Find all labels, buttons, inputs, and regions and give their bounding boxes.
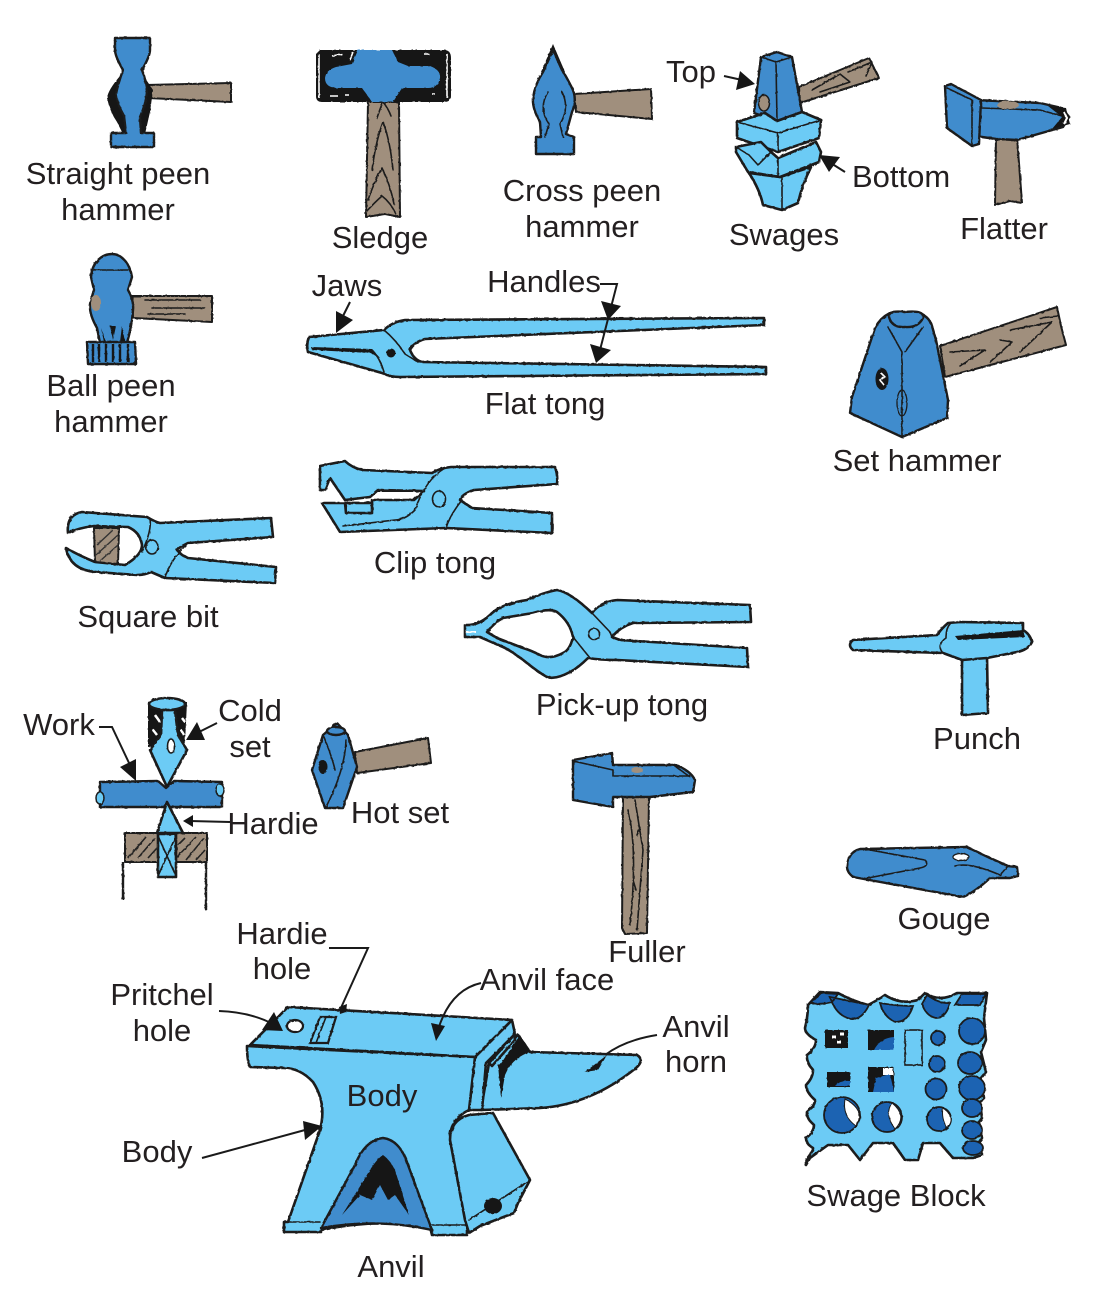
tool: anvil [110,916,730,1284]
labels: flat tong: Handles [487,264,601,299]
label: flatter: Flatter [960,211,1048,246]
label: ball peen hammer: Ball peen [46,368,176,403]
icon: ball peen hammer [87,254,212,364]
labels: flat tong: Flat tong [485,386,605,421]
labels: anvil: hole [253,951,311,986]
icon: gouge [847,847,1018,897]
arrow: anvil face [431,983,481,1041]
tool: cross peen hammer [503,44,661,244]
label: cross peen hammer: hammer [525,209,639,244]
label: sledge: Sledge [332,220,428,255]
tool: ball peen hammer [46,254,212,439]
icon: flat tong [307,318,766,377]
labels: swages [666,54,950,252]
labels: swages: Swages [729,217,839,252]
labels: anvil: hole [133,1013,191,1048]
labels: swages: Top [666,54,716,89]
arrow: cold set [186,722,217,740]
icon: cold set on work over hardie [96,698,224,910]
label: punch: Punch [933,721,1021,756]
tool: clip tong [320,461,557,580]
labels: flat tong [312,264,605,421]
tool: gouge [847,847,1018,936]
tool: swage block [805,992,987,1213]
tool: fuller [573,753,695,969]
labels: anvil: Hardie [236,916,328,951]
label: swage block: Swage Block [806,1178,986,1213]
arrow: work [99,727,136,781]
icon: anvil [247,1007,641,1235]
tool: punch [850,622,1032,756]
label: straight peen hammer: hammer [61,192,175,227]
label: pick-up tong: Pick-up tong [536,687,708,722]
icon: pick-up tong [465,590,751,678]
arrow: pritchel hole [219,1011,283,1031]
label: gouge: Gouge [897,901,991,936]
labels: anvil: Body [347,1078,418,1113]
tool: hot set [312,723,449,830]
icon: hot set [312,723,431,808]
label: cross peen hammer: Cross peen [503,173,661,208]
tool: sledge [316,50,451,255]
tool: pick-up tong [465,590,751,722]
icon: flatter [945,84,1070,205]
labels: anvil: Pritchel [110,977,214,1012]
icon: swages [736,52,879,210]
tool: flatter [945,84,1070,246]
label: fuller: Fuller [608,934,686,969]
label: ball peen hammer: hammer [54,404,168,439]
arrow: hardie [183,815,230,827]
labels: flat tong: Jaws [312,268,382,303]
tool: flat tong [307,264,766,421]
tool: square bit [66,512,276,634]
labels: anvil: horn [665,1044,727,1079]
icon: punch [850,622,1032,715]
tool: straight peen hammer [26,38,231,227]
arrows: jaws and handles [336,284,621,363]
labels: cold set work hardie: Cold [218,693,282,728]
labels: cold set work hardie: set [229,729,271,764]
labels: anvil: Anvil [357,1249,425,1284]
arrow: bottom [819,155,845,172]
labels: cold set work hardie: Work [23,707,95,742]
icon: cross peen hammer [533,44,652,154]
arrow: anvil horn [605,1035,657,1055]
icon: clip tong [320,461,557,533]
tool: set hammer [833,307,1066,478]
labels: anvil: Body [122,1134,193,1169]
arrow: hardie hole [329,948,368,1014]
icon: swage block [805,992,987,1165]
icon: set hammer [850,307,1066,437]
label: hot set: Hot set [351,795,449,830]
label: set hammer: Set hammer [833,443,1001,478]
labels: cold set work hardie: Hardie [227,806,319,841]
labels: anvil: Anvil face [480,962,614,997]
labels: swages: Bottom [852,159,950,194]
labels: anvil [110,916,730,1284]
arrow: top [724,71,755,90]
tool: swages [666,52,950,252]
label: square bit: Square bit [77,599,219,634]
icon: fuller [573,753,695,934]
icon: sledge [316,50,451,217]
labels: cold set work hardie [23,693,319,841]
icon: square bit [66,512,276,583]
label: clip tong: Clip tong [374,545,496,580]
labels: anvil: Anvil [662,1009,730,1044]
tool: cold set, work and hardie [23,693,319,910]
label: straight peen hammer: Straight peen [26,156,210,191]
arrow: body [202,1121,322,1158]
icon: straight peen hammer [107,38,231,147]
